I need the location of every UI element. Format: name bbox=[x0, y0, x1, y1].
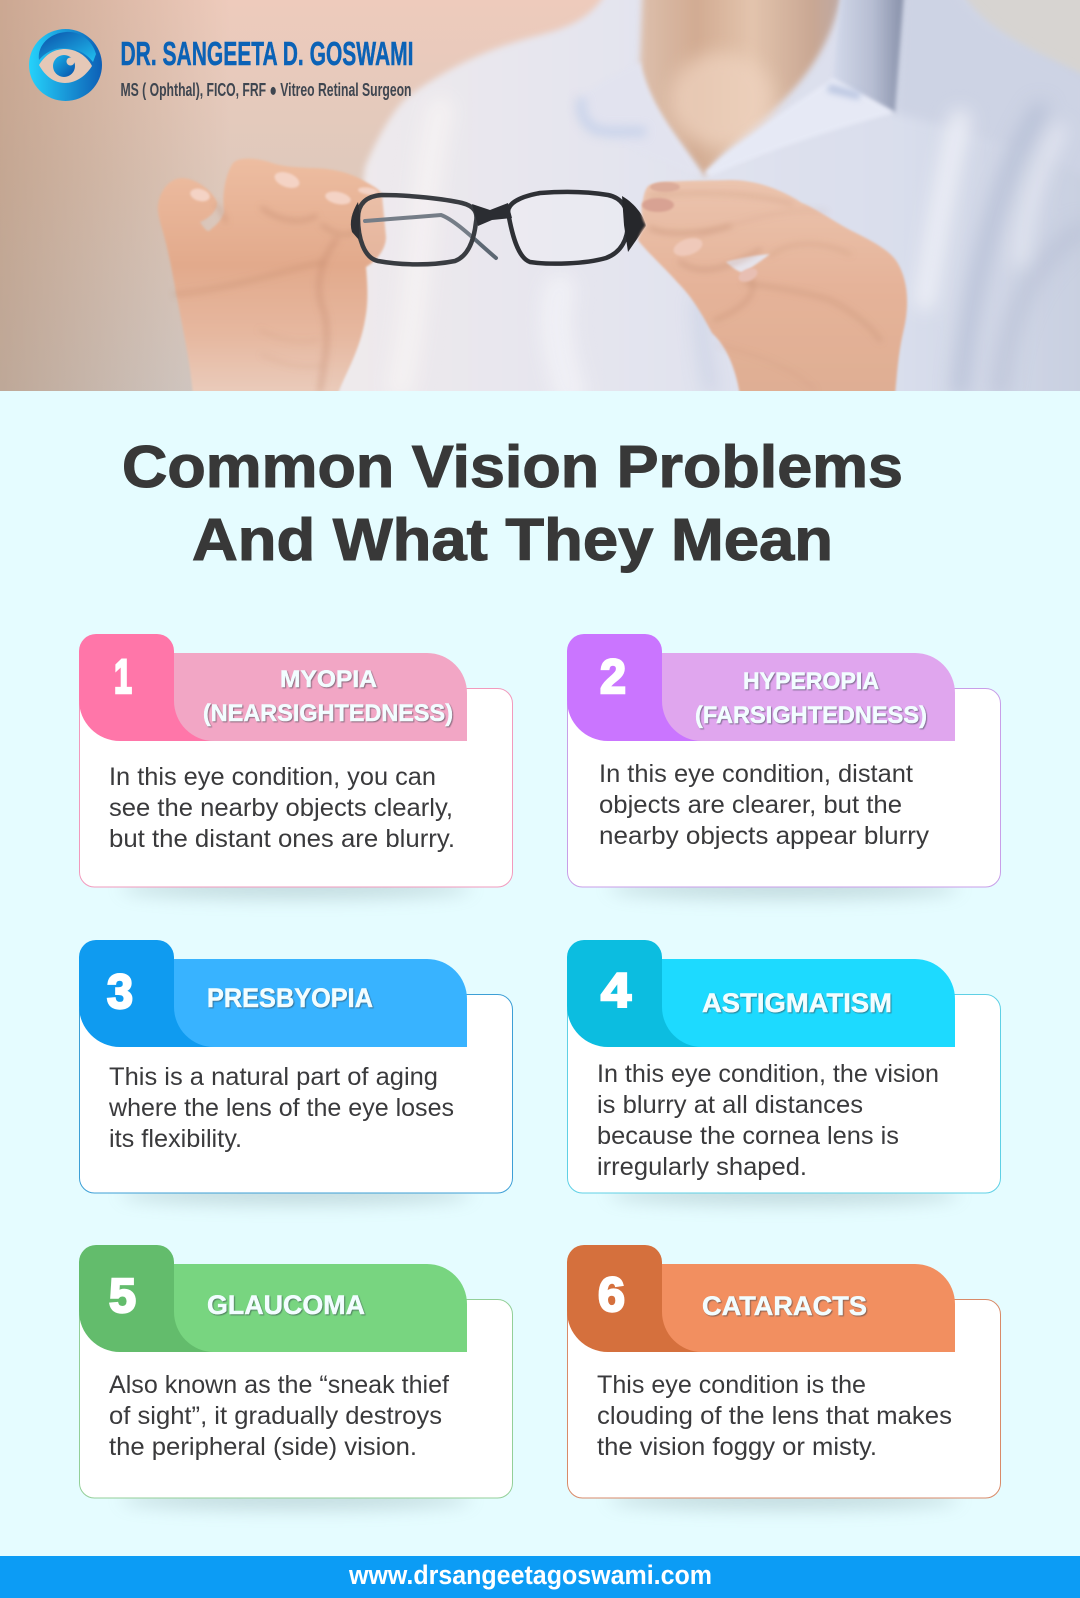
heading tab bbox=[174, 653, 467, 741]
heading tab bbox=[174, 1264, 467, 1352]
panel: myopia bbox=[79, 634, 512, 898]
description: This is a natural part of aging bbox=[109, 1063, 438, 1091]
hair bbox=[900, 0, 955, 22]
card body bbox=[80, 1300, 512, 1498]
heading: CATARACTS bbox=[702, 1291, 867, 1321]
collar shadow bbox=[828, 88, 860, 96]
logo iris bbox=[53, 55, 75, 77]
card shadow bbox=[121, 1184, 471, 1204]
photo: hands holding glasses bbox=[0, 0, 1080, 400]
description: where the lens of the eye loses bbox=[108, 1094, 454, 1122]
heading bbox=[695, 668, 927, 729]
card body bbox=[568, 1300, 1000, 1498]
heading: MYOPIA bbox=[280, 666, 377, 693]
number: 3 bbox=[107, 966, 133, 1019]
footer bar bbox=[0, 1556, 1080, 1598]
number tab bbox=[79, 940, 216, 1047]
shirt folds bbox=[548, 104, 1075, 391]
number tab bbox=[79, 634, 216, 741]
logo bbox=[29, 29, 414, 101]
logo credentials: MS ( Ophthal), FICO, FRF ● Vitreo Retinal Surgeon bbox=[120, 79, 412, 100]
neck highlight bbox=[670, 52, 774, 148]
number: 1 bbox=[114, 651, 132, 704]
card shadow bbox=[609, 1489, 959, 1509]
card body bbox=[80, 994, 512, 1193]
number: 4 bbox=[601, 965, 631, 1018]
right hand creases bbox=[650, 193, 760, 318]
title line 1: Common Vision Problems bbox=[122, 434, 903, 500]
number tab bbox=[79, 1245, 216, 1352]
number: 5 bbox=[109, 1270, 136, 1323]
right hinge bbox=[622, 196, 646, 252]
left collar edge shading bbox=[581, 98, 646, 132]
description: nearby objects appear blurry bbox=[599, 822, 930, 850]
description bbox=[109, 763, 455, 853]
wall upper right bbox=[966, 0, 1080, 74]
description: In this eye condition, you can bbox=[109, 763, 436, 791]
description: the peripheral (side) vision. bbox=[109, 1433, 417, 1461]
description bbox=[109, 1371, 449, 1461]
description: but the distant ones are blurry. bbox=[109, 825, 455, 853]
title line 2: And What They Mean bbox=[192, 507, 833, 573]
description: see the nearby objects clearly, bbox=[109, 794, 453, 822]
neck bbox=[640, 0, 843, 177]
description: irregularly shaped. bbox=[597, 1153, 807, 1181]
heading tab bbox=[662, 1264, 955, 1352]
title bbox=[122, 434, 903, 573]
logo iris highlight bbox=[66, 58, 74, 66]
backdrop left shading bbox=[0, 0, 190, 391]
left hinge bbox=[351, 202, 360, 240]
card shadow bbox=[609, 1184, 959, 1204]
heading bbox=[203, 666, 453, 727]
number tab bbox=[567, 1245, 704, 1352]
panel: astigmatism bbox=[567, 940, 1000, 1204]
description: is blurry at all distances bbox=[597, 1091, 863, 1119]
card body bbox=[568, 688, 1000, 887]
left collar bbox=[636, 62, 701, 174]
glasses temple arm bbox=[365, 215, 496, 258]
card shadow bbox=[609, 878, 959, 898]
left hand creases bbox=[176, 205, 355, 390]
right hand nails bbox=[642, 182, 760, 285]
number tab bbox=[567, 634, 704, 741]
description: of sight”, it gradually destroys bbox=[109, 1402, 442, 1430]
description: because the cornea lens is bbox=[597, 1122, 899, 1150]
card body bbox=[80, 688, 512, 887]
description: In this eye condition, distant bbox=[599, 760, 913, 788]
right collar back bbox=[833, 0, 905, 113]
card body bbox=[568, 994, 1000, 1193]
heading: HYPEROPIA bbox=[743, 668, 879, 695]
number: 2 bbox=[600, 651, 626, 704]
description: This eye condition is the bbox=[597, 1371, 866, 1399]
right hand bbox=[638, 180, 907, 395]
description: the vision foggy or misty. bbox=[597, 1433, 877, 1461]
description bbox=[108, 1063, 454, 1153]
left lens bbox=[358, 195, 476, 264]
heading: GLAUCOMA bbox=[207, 1290, 365, 1320]
photo backdrop bbox=[0, 0, 606, 391]
footer background bbox=[0, 1556, 1080, 1598]
logo name: DR. SANGEETA D. GOSWAMI bbox=[120, 35, 414, 72]
website url: www.drsangeetagoswami.com bbox=[348, 1560, 712, 1590]
logo ring bbox=[29, 29, 102, 101]
glasses bbox=[351, 192, 646, 264]
heading tab bbox=[662, 653, 955, 741]
card shadow bbox=[121, 878, 471, 898]
description: Also known as the “sneak thief bbox=[109, 1371, 449, 1399]
heading tab bbox=[174, 959, 467, 1047]
panel: glaucoma bbox=[79, 1245, 512, 1509]
number: 6 bbox=[598, 1269, 625, 1322]
panel: hyperopia bbox=[567, 634, 1000, 898]
panel: presbyopia bbox=[79, 940, 512, 1204]
number tab bbox=[567, 940, 704, 1047]
description: objects are clearer, but the bbox=[599, 791, 902, 819]
shirt bbox=[335, 0, 1080, 400]
description: In this eye condition, the vision bbox=[597, 1060, 939, 1088]
left hand bbox=[158, 158, 386, 395]
description bbox=[597, 1060, 939, 1181]
logo dark upper arc bbox=[39, 32, 96, 62]
heading: PRESBYOPIA bbox=[207, 983, 373, 1013]
description: its flexibility. bbox=[109, 1125, 242, 1153]
description bbox=[599, 760, 930, 850]
left hand nails bbox=[189, 169, 378, 207]
description: clouding of the lens that makes bbox=[597, 1402, 952, 1430]
right collar front bbox=[705, 78, 895, 177]
heading: ASTIGMATISM bbox=[702, 988, 892, 1018]
description bbox=[597, 1371, 952, 1461]
shirt shoulder right bbox=[898, 0, 940, 116]
bridge bbox=[472, 203, 512, 226]
heading tab bbox=[662, 959, 955, 1047]
right lens bbox=[508, 192, 628, 264]
card shadow bbox=[121, 1489, 471, 1509]
gap between fingers bbox=[726, 254, 770, 273]
logo eye white bbox=[39, 49, 92, 83]
heading: (NEARSIGHTEDNESS) bbox=[203, 700, 453, 727]
panel: cataracts bbox=[567, 1245, 1000, 1509]
heading: (FARSIGHTEDNESS) bbox=[695, 702, 927, 729]
logo icon: eye bbox=[29, 29, 102, 101]
